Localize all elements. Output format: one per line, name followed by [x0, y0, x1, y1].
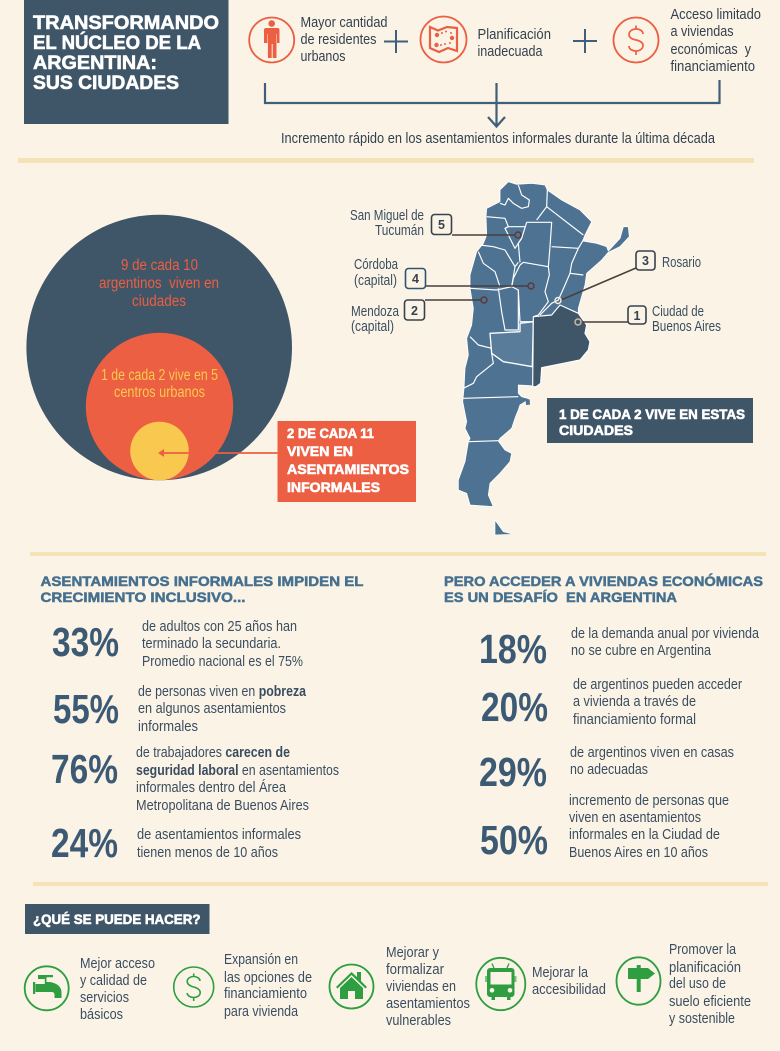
map of Argentina: [458, 182, 629, 535]
text: land use: Promover la: [669, 941, 737, 958]
stat: 50%: informales en la Ciudad de: [569, 826, 720, 843]
text: land use: suelo eficiente: [669, 993, 751, 1010]
stat: 33%: [52, 618, 303, 670]
title block: EL NÚCLEO DE LA: [33, 32, 201, 54]
stat: 29%: de argentinos viven en casas: [570, 744, 734, 761]
callout: 1 de cada 2: 1 DE CADA 2 VIVE EN ESTAS: [559, 406, 745, 422]
stat: 55%: informales: [138, 718, 198, 735]
text: land use: del uso de: [669, 975, 726, 992]
text: residents: de residentes: [300, 31, 376, 48]
text: residents: urbanos: [300, 48, 346, 65]
text: conclusion: Incremento rápido en los asentamientos informales durante la última década: [281, 130, 716, 147]
icon: dollar: [614, 18, 658, 62]
stat: 20%: a vivienda a través de: [573, 693, 696, 710]
text: housing access: a viviendas: [670, 23, 734, 40]
stat: 24%: tienen menos de 10 años: [137, 844, 278, 861]
text: housing: formalizar: [386, 961, 444, 978]
nested circle chart: [26, 215, 292, 480]
stat: 20%: [481, 676, 742, 730]
text: land use: planificación: [669, 959, 741, 976]
stat: 29%: [479, 744, 734, 795]
label: Mendoza: Mendoza: [351, 303, 400, 320]
icon: water tap: [25, 966, 69, 1010]
text: basic services: [80, 955, 155, 1023]
text: accessibility: [532, 964, 606, 998]
nested circle chart: argentinos viven en: [99, 275, 219, 292]
stat: 18%: [479, 625, 760, 672]
arrow: to callout: [158, 449, 278, 457]
stat: 18%: 18%: [479, 626, 547, 672]
label: Mendoza: (capital): [351, 318, 394, 335]
stat: 55%: de personas viven en pobreza: [138, 683, 307, 700]
stat: 33%: 33%: [52, 619, 119, 665]
label: Córdoba: (capital): [354, 272, 397, 289]
text: residents: [300, 14, 388, 65]
stat: 33%: Promedio nacional es el 75%: [142, 653, 303, 670]
text: land use: [669, 941, 751, 1027]
stat: 24%: de asentamientos informales: [137, 826, 301, 843]
heading: left: ASENTAMIENTOS INFORMALES IMPIDEN EL: [40, 573, 364, 589]
stat: 76%: [51, 744, 339, 814]
heading: right: [444, 572, 763, 605]
callout: informal settlements: 2 DE CADA 11: [287, 425, 374, 441]
title block: [24, 0, 228, 124]
label: Buenos Aires: [575, 303, 721, 335]
stat: 76%: seguridad laboral en asentamientos: [136, 762, 339, 779]
stat: 20%: de argentinos pueden acceder: [573, 676, 742, 693]
text: housing access: [670, 6, 761, 75]
text: planning: [478, 26, 551, 60]
stat: 76%: informales dentro del Área: [136, 779, 287, 796]
icon: bus: [476, 958, 525, 1010]
text: financing: para vivienda: [224, 1003, 299, 1020]
label: Rosario: [555, 251, 701, 304]
label: Rosario: Rosario: [662, 254, 701, 271]
label: Tucumán: Tucumán: [375, 222, 424, 239]
stat: 24%: 24%: [51, 820, 118, 866]
icon: dollar: [174, 967, 214, 1007]
label: Tucumán: 5: [438, 218, 445, 232]
label: Córdoba: [354, 256, 534, 289]
stat: 20%: financiamiento formal: [573, 711, 696, 728]
stat: 55%: [53, 683, 307, 735]
stat: 29%: 29%: [479, 749, 547, 795]
heading: left: [40, 573, 364, 605]
stat: 33%: terminado la secundaria.: [142, 635, 281, 652]
stat: 50%: [480, 792, 729, 863]
plus sign: [384, 30, 408, 53]
stat: 55%: 55%: [53, 686, 119, 732]
title block: ARGENTINA:: [33, 53, 157, 74]
callout: informal settlements: VIVEN EN: [287, 443, 353, 459]
label: Mendoza: 2: [411, 304, 418, 318]
stat: 18%: no se cubre en Argentina: [571, 642, 712, 659]
nested circle chart: 9 de cada 10: [121, 257, 198, 274]
text: basic services: Mejor acceso: [80, 955, 155, 972]
callout: 1 de cada 2: CIUDADES: [559, 422, 633, 438]
text: planning: inadecuada: [478, 43, 543, 60]
icon: signpost: [616, 957, 660, 1005]
label: Mendoza: [351, 297, 487, 335]
icon: map: [420, 16, 466, 62]
label: Buenos Aires: Buenos Aires: [652, 318, 721, 335]
text: housing access: Acceso limitado: [670, 6, 761, 23]
stat: 24%: [51, 820, 301, 866]
callout: informal settlements: INFORMALES: [287, 479, 380, 495]
label: Buenos Aires: 1: [634, 309, 641, 323]
text: basic services: y calidad de: [80, 972, 147, 989]
stat: 20%: 20%: [481, 684, 548, 730]
text: housing: [386, 944, 470, 1029]
nested circle chart: centros urbanos: [114, 384, 205, 401]
text: financing: financiamiento: [224, 985, 307, 1002]
nested circle chart: 1 de cada 2 vive en 5: [101, 367, 218, 384]
stat: 50%: viven en asentamientos: [569, 809, 701, 826]
label: Córdoba: 4: [412, 272, 419, 286]
stat: 33%: de adultos con 25 años han: [142, 618, 297, 635]
nested circle chart: ciudades: [132, 293, 186, 310]
text: financing: Expansión en: [224, 951, 298, 968]
stat: 76%: Metropolitana de Buenos Aires: [136, 797, 309, 814]
plus sign: [573, 29, 597, 53]
bracket arrow: [265, 80, 720, 126]
stat: 76%: 76%: [51, 746, 118, 792]
icon: person: [249, 18, 294, 62]
heading: what can be done: ¿QUÉ SE PUEDE HACER?: [33, 911, 200, 927]
text: housing: vulnerables: [386, 1012, 451, 1029]
heading: left: CRECIMIENTO INCLUSIVO...: [40, 589, 246, 605]
stat: 50%: Buenos Aires en 10 años: [569, 844, 708, 861]
label: Córdoba: Córdoba: [354, 256, 398, 273]
callout: informal settlements: [278, 421, 416, 502]
text: housing access: financiamiento: [670, 58, 755, 75]
label: Tucumán: [350, 207, 521, 239]
heading: right: PERO ACCEDER A VIVIENDAS ECONÓMICAS: [444, 572, 763, 589]
text: housing: asentamientos: [386, 995, 470, 1012]
stat: 50%: 50%: [480, 817, 548, 863]
stat: 29%: no adecuadas: [570, 761, 648, 778]
stat: 55%: en algunos asentamientos: [138, 700, 286, 717]
text: housing access: económicas y: [670, 41, 751, 58]
title block: TRANSFORMANDO: [33, 13, 219, 34]
text: accessibility: Mejorar la: [532, 964, 589, 981]
label: Tucumán: San Miguel de: [350, 207, 424, 224]
icon: house: [330, 964, 374, 1008]
label: Rosario: 3: [642, 254, 649, 268]
text: financing: las opciones de: [224, 969, 312, 986]
heading: right: ES UN DESAFÍO EN ARGENTINA: [444, 589, 677, 605]
text: basic services: básicos: [80, 1006, 123, 1023]
heading: what can be done: [25, 904, 210, 934]
callout: informal settlements: ASENTAMIENTOS: [287, 461, 409, 477]
title block: SUS CIUDADES: [33, 73, 179, 94]
text: residents: Mayor cantidad: [300, 14, 388, 31]
text: accessibility: accesibilidad: [532, 981, 606, 998]
text: basic services: servicios: [80, 989, 129, 1006]
label: Buenos Aires: Ciudad de: [652, 303, 704, 320]
stat: 50%: incremento de personas que: [569, 792, 729, 809]
callout: 1 de cada 2: [547, 398, 753, 443]
text: financing: [224, 951, 312, 1020]
text: housing: viviendas en: [386, 978, 456, 995]
text: housing: Mejorar y: [386, 944, 439, 961]
text: land use: y sostenible: [669, 1010, 735, 1027]
stat: 76%: de trabajadores carecen de: [136, 744, 290, 761]
text: planning: Planificación: [478, 26, 551, 43]
